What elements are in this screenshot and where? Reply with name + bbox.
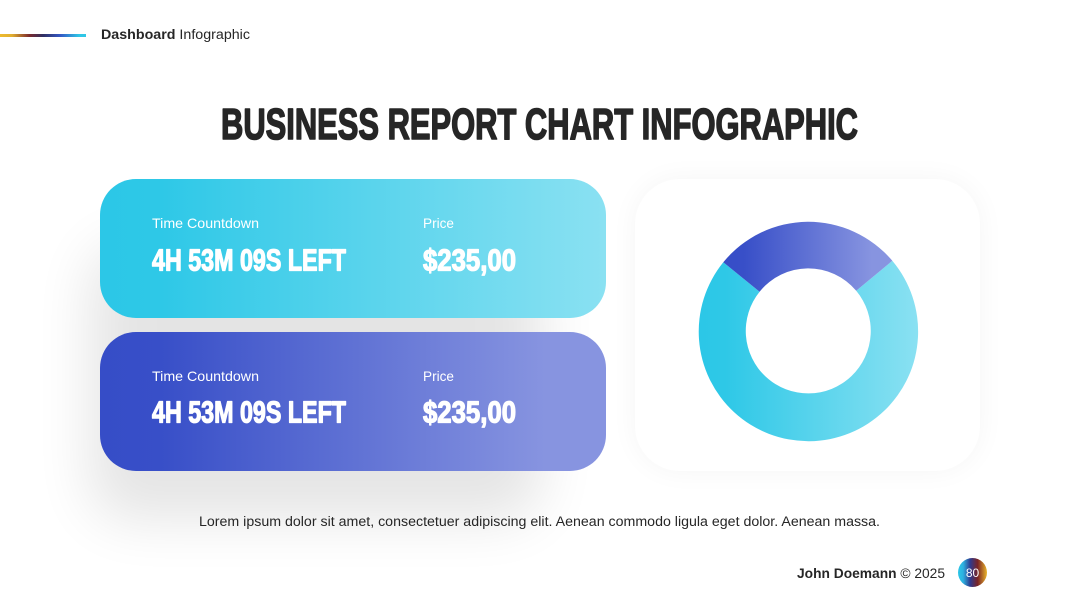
value: time left: 4H 53M 09S LEFT xyxy=(152,242,346,278)
description text: Lorem ipsum dolor sit amet, consectetuer adipiscing elit. Aenean commodo ligula eget dolor. Aenean massa. xyxy=(199,514,880,529)
header label: Dashboard Infographic xyxy=(101,27,250,42)
label: time countdown: Time Countdown xyxy=(152,368,259,384)
value: price: $235,00 xyxy=(423,242,516,278)
card shadow xyxy=(90,245,542,520)
panel: donut card xyxy=(635,179,980,471)
label: price: Price xyxy=(423,215,454,231)
panel: blue card xyxy=(100,332,606,471)
value: price: $235,00 xyxy=(423,394,516,430)
header rule xyxy=(0,34,86,37)
value: time left: 4H 53M 09S LEFT xyxy=(152,394,346,430)
footer credit: John Doemann © 2025 xyxy=(797,566,945,581)
label: price: Price xyxy=(423,368,454,384)
panel: cyan card xyxy=(100,179,606,318)
donut chart xyxy=(699,222,918,441)
segment: cyan xyxy=(699,261,918,441)
page number badge: 80 xyxy=(966,566,979,580)
segment: blue xyxy=(723,222,892,292)
label: time countdown: Time Countdown xyxy=(152,215,259,231)
page number badge xyxy=(958,558,987,587)
